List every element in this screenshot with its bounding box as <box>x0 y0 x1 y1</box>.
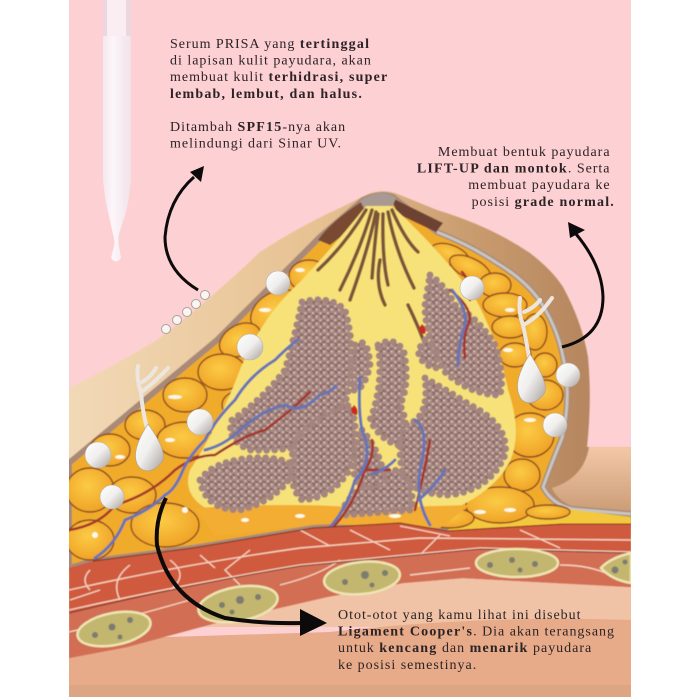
fat highlights <box>92 268 536 538</box>
areola right <box>390 197 443 232</box>
serum dropper <box>103 0 131 262</box>
muscle fibres <box>69 526 631 632</box>
nipple cap <box>360 193 396 209</box>
foot skin fold <box>552 447 631 514</box>
text: serum hydration: di lapisan kulit payudara, akan <box>170 54 372 69</box>
glandular lobules <box>200 275 506 515</box>
large drop with wisp, left <box>136 366 168 471</box>
text: serum hydration: Ditambah SPF15-nya akan <box>170 120 346 135</box>
text: lift up: Membuat bentuk payudara <box>438 145 611 160</box>
muscle lower band <box>69 548 631 658</box>
text: serum hydration: membuat kulit terhidrasi, super <box>170 70 388 85</box>
text: lift up: LIFT-UP dan montok. Serta <box>417 162 611 177</box>
muscle dark lines <box>69 523 631 613</box>
small serum bubbles on skin <box>162 290 210 334</box>
rib bones <box>75 549 631 652</box>
text: serum hydration: lembab, lembut, dan halus. <box>170 87 363 102</box>
rib speckles <box>92 557 628 640</box>
arrow: to bottom text <box>157 498 327 636</box>
blood vessels <box>69 272 470 558</box>
text: serum hydration: melindungi dari Sinar UV. <box>170 137 342 152</box>
text: ligament cooper: Ligament Cooper's. Dia akan terangsang <box>338 625 615 640</box>
lower orange rim <box>205 504 468 529</box>
text: ligament cooper: untuk kencang dan menarik payudara <box>338 641 592 656</box>
text: serum hydration: Serum PRISA yang tertinggal <box>170 37 370 52</box>
areola left <box>318 202 364 246</box>
text: lift up: membuat payudara ke <box>468 178 611 193</box>
fat lobes <box>66 239 570 560</box>
skin silhouette <box>69 190 590 505</box>
text: ligament cooper: Otot-otot yang kamu lihat ini disebut <box>338 608 582 623</box>
fat layer with membrane outline <box>69 195 631 568</box>
right membrane shading <box>437 232 631 514</box>
text: ligament cooper: ke posisi semestinya. <box>338 658 477 673</box>
milk ducts <box>318 210 425 345</box>
illustration: breast anatomy cross-section <box>66 191 631 658</box>
large drop with wisp, right <box>518 298 552 403</box>
blue vessels <box>95 290 465 558</box>
red spots <box>351 324 426 415</box>
central glandular yellow area <box>188 206 516 520</box>
arrow: to right text <box>562 222 603 347</box>
arrow: to upper left text <box>165 166 204 290</box>
text: lift up: posisi grade normal. <box>472 195 615 210</box>
serum droplets inside tissue <box>85 271 580 509</box>
yellow tail on right <box>447 508 631 531</box>
muscle layer <box>69 523 631 637</box>
red vessels <box>69 272 470 530</box>
